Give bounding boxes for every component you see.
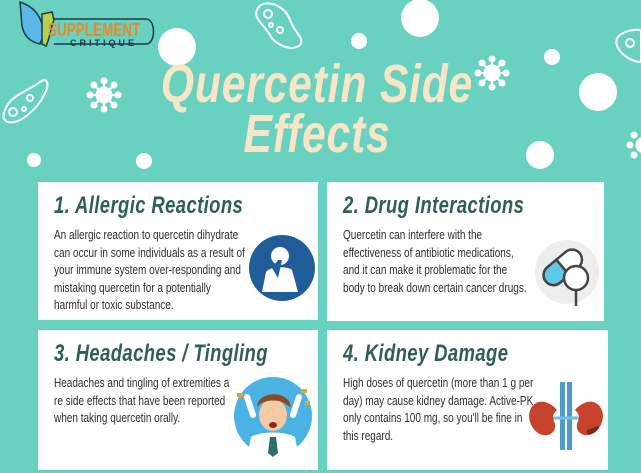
heading: 3. Headaches / Tingling xyxy=(54,340,268,367)
text block: and it can make it problematic for the xyxy=(343,262,507,277)
title: Quercetin Side xyxy=(161,54,473,114)
panel: headaches xyxy=(38,330,318,470)
text block: Headaches and tingling of extremities a xyxy=(54,375,229,390)
text block: Quercetin can interfere with the xyxy=(343,227,482,242)
text block: effectiveness of antibiotic medications, xyxy=(343,244,514,260)
logo xyxy=(19,0,154,48)
text block: High doses of quercetin (more than 1 g per xyxy=(343,375,533,390)
text block: your immune system over-responding and xyxy=(54,262,241,277)
title xyxy=(161,54,473,164)
icon: sneezing person xyxy=(249,235,315,301)
panel: drug interactions xyxy=(327,182,604,321)
logo: CRITIQUE xyxy=(70,38,137,48)
text block: when taking quercetin orally. xyxy=(54,410,180,425)
heading: 4. Kidney Damage xyxy=(343,340,508,367)
panel: allergic reactions xyxy=(38,182,318,320)
text block: this regard. xyxy=(343,428,393,442)
text block: only contains 100 mg, so you'll be fine in xyxy=(343,410,522,425)
text block: body to break down certain cancer drugs. xyxy=(343,280,527,294)
text block xyxy=(54,375,230,425)
background decorations xyxy=(2,0,641,169)
text block: day) may cause kidney damage. Active-PK xyxy=(343,392,533,408)
text block: re side effects that have been reported xyxy=(54,392,225,408)
icon: kidneys xyxy=(529,382,603,450)
text block: can occur in some individuals as a result of xyxy=(54,244,245,260)
title: Effects xyxy=(243,104,391,164)
heading: 1. Allergic Reactions xyxy=(54,192,243,219)
text block xyxy=(343,227,527,294)
heading: 2. Drug Interactions xyxy=(343,192,524,219)
logo text: SUPPLEMENT xyxy=(48,20,140,40)
text block xyxy=(54,227,245,312)
text block: harmful or toxic substance. xyxy=(54,297,174,312)
icon: pill and magnifier xyxy=(535,240,599,306)
text block: mistaking quercetin for a potentially xyxy=(54,280,211,294)
text block xyxy=(343,375,534,442)
text block: An allergic reaction to quercetin dihydrate xyxy=(54,227,238,242)
panel: kidney damage xyxy=(327,330,608,470)
icon: man with headache xyxy=(234,377,312,457)
